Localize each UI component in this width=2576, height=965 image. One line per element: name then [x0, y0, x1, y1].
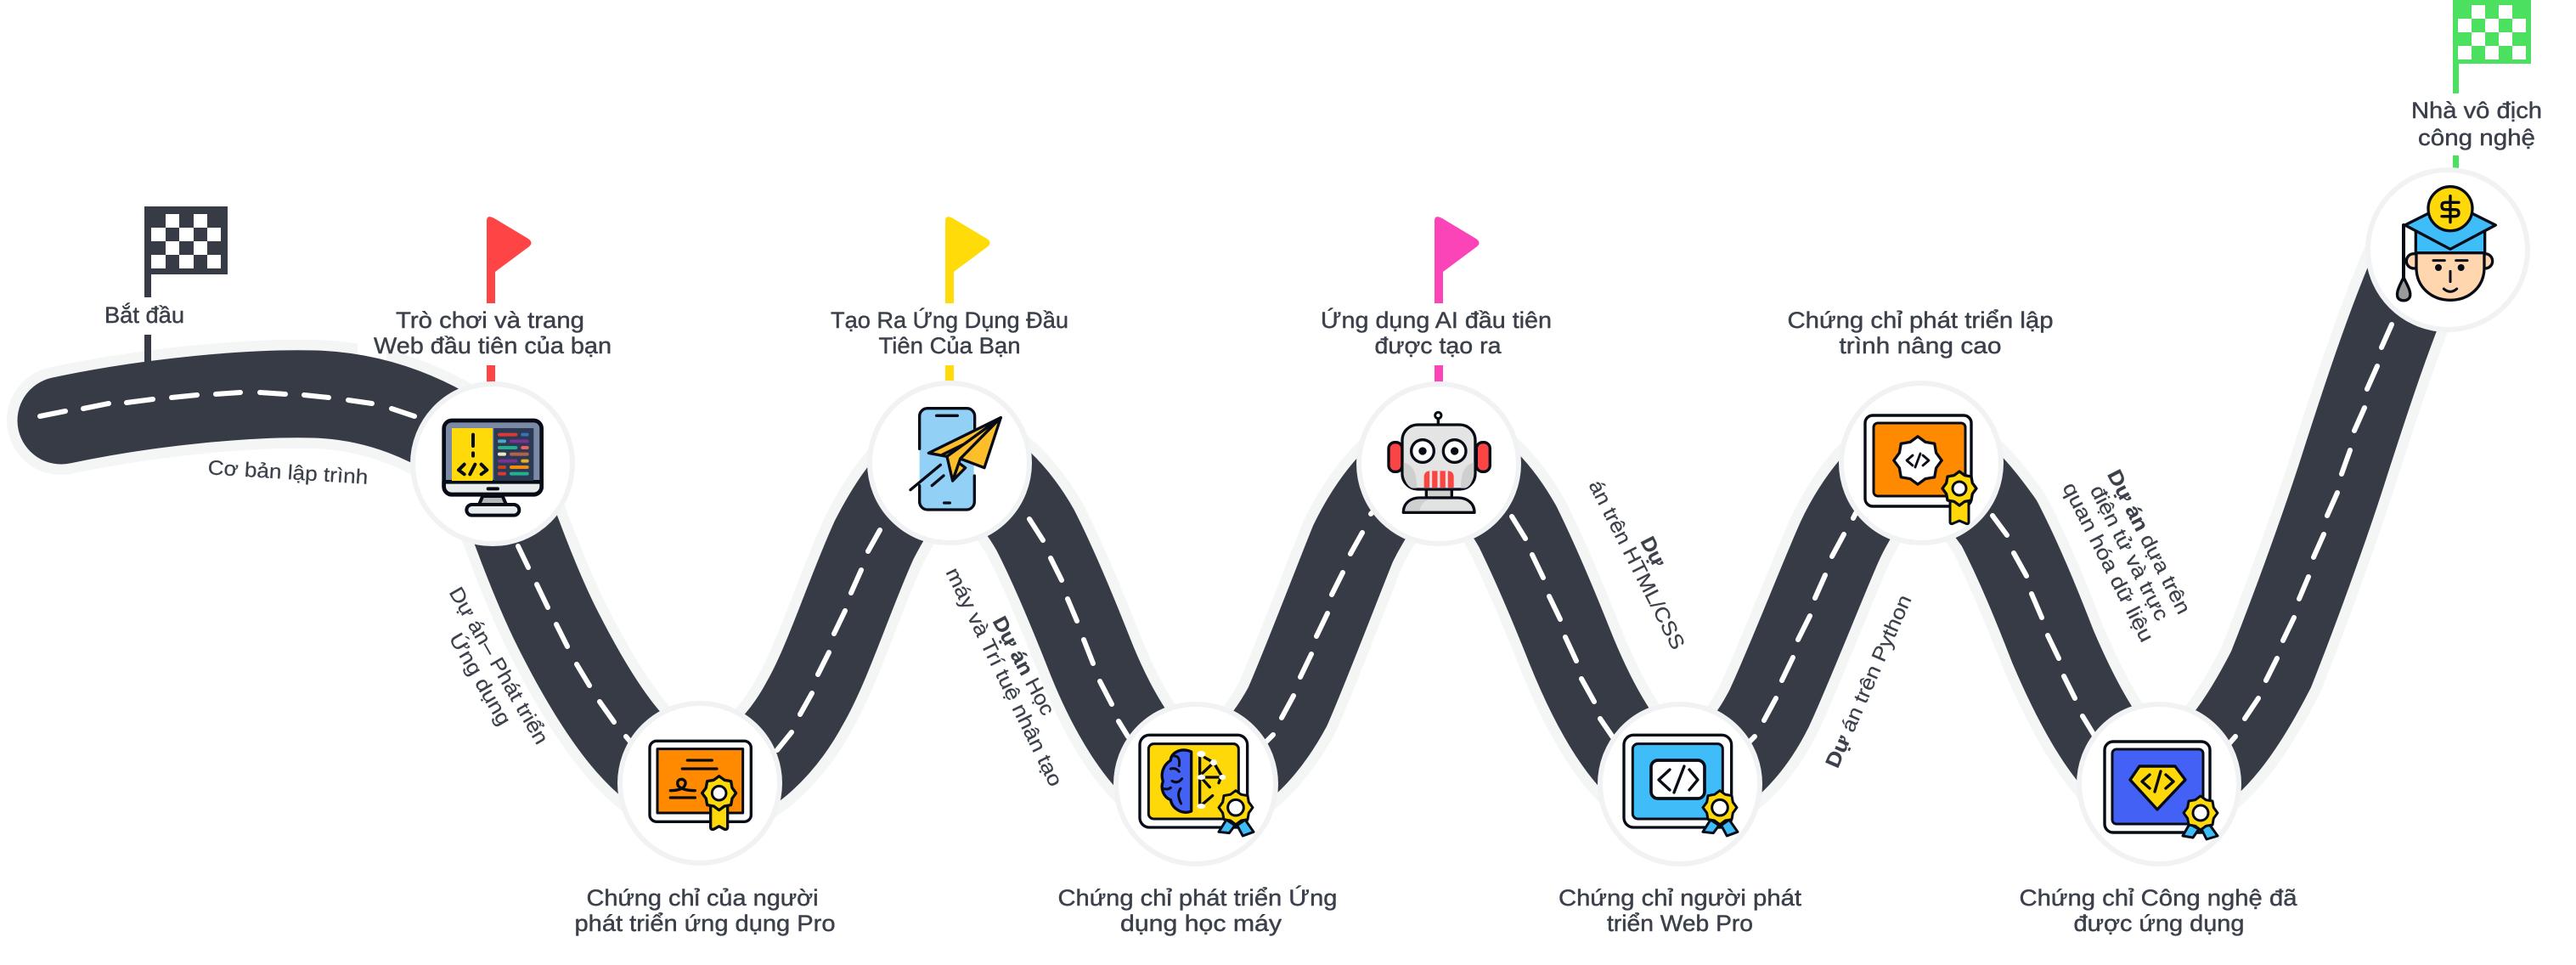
heading: machine learning certificate: dụng học máy	[1120, 911, 1282, 936]
road label: HTML CSS project: án trên HTML/CSS	[1584, 477, 1689, 653]
heading: pro app developer certificate: phát triển ứng dụng Pro	[574, 911, 836, 936]
heading: advanced certificate	[1787, 308, 2054, 358]
road label: machine learning and AI project: máy và Trí tuệ nhân tạo	[941, 564, 1067, 790]
heading: first app	[831, 307, 1068, 358]
heading: pro web developer certificate: triển Web Pro	[1607, 911, 1753, 936]
heading: first app: Tạo Ra Ứng Dụng Đầu	[831, 307, 1068, 333]
icon: web developer certificate	[1624, 735, 1738, 836]
milestone circles	[413, 170, 2528, 864]
icon: phone with paper plane	[910, 408, 1001, 511]
road label: programming basics: Cơ bản lập trình	[207, 456, 369, 489]
road label: app development project: Dự án– Phát triển	[444, 584, 553, 748]
road: white centre dashes	[40, 324, 2392, 750]
road: dark asphalt	[61, 255, 2421, 786]
heading: tech champion	[2411, 98, 2542, 150]
heading: first AI app: được tạo ra	[1374, 333, 1502, 358]
heading: start: Bắt đầu	[104, 302, 184, 328]
icon: machine learning certificate	[1140, 735, 1254, 836]
icon: graduate with dollar coin	[2397, 187, 2495, 301]
heading: machine learning certificate: Chứng chỉ phát triển Ứng	[1058, 884, 1337, 911]
flag: red milestone	[487, 217, 532, 382]
heading: first game and website: Trò chơi và trang	[396, 308, 584, 333]
heading: tech champion: Nhà vô địch	[2411, 98, 2542, 123]
icon: code monitor	[444, 420, 542, 516]
road label: electronics and data visualization project: Dự án dựa trên	[2102, 466, 2195, 618]
flag: start checkered	[144, 206, 228, 365]
road label: electronics and data visualization project	[2058, 466, 2195, 646]
flag: pink milestone	[1435, 217, 1480, 382]
heading: first app: Tiên Của Bạn	[878, 333, 1021, 358]
heading: pro web developer certificate	[1559, 885, 1802, 936]
heading: first game and website: Web đầu tiên của bạn	[374, 333, 612, 358]
road label: Python project: Dự án trên Python	[1821, 591, 1917, 771]
road label: electronics and data visualization project: điện tử và trực	[2085, 482, 2173, 624]
heading: applied technology certificate: được ứng dụng	[2074, 911, 2244, 936]
heading: pro app developer certificate	[574, 885, 836, 936]
icon: gear certificate	[1865, 415, 1976, 524]
heading: pro app developer certificate: Chứng chỉ của người	[586, 885, 819, 911]
heading: advanced certificate: trình nâng cao	[1840, 333, 2001, 358]
heading: pro web developer certificate: Chứng chỉ người phát	[1559, 885, 1802, 911]
road: light outer border	[61, 255, 2421, 786]
icon: robot	[1389, 412, 1490, 512]
heading: applied technology certificate	[2020, 885, 2298, 936]
road label: app development project: Ứng dụng	[444, 629, 516, 730]
heading: first AI app: Ứng dụng AI đầu tiên	[1321, 307, 1552, 333]
heading: applied technology certificate: Chứng chỉ Công nghệ đã	[2020, 885, 2298, 911]
road label: machine learning and AI project: Dự án Học	[988, 612, 1059, 720]
road label: HTML CSS project: Dự	[1636, 533, 1670, 571]
road: notch in border	[358, 336, 386, 364]
flag: green finish	[2453, 0, 2531, 169]
heading: machine learning certificate	[1058, 884, 1337, 936]
heading: first game and website	[374, 308, 612, 358]
heading: tech champion: công nghệ	[2418, 125, 2535, 150]
heading: advanced certificate: Chứng chỉ phát triển lập	[1787, 308, 2054, 333]
flag: yellow milestone	[945, 217, 990, 382]
icon: diploma certificate	[650, 741, 751, 829]
road label: electronics and data visualization project: quan hóa dữ liệu	[2058, 479, 2158, 646]
heading: first AI app	[1321, 307, 1552, 358]
icon: applied technology certificate	[2105, 742, 2218, 839]
